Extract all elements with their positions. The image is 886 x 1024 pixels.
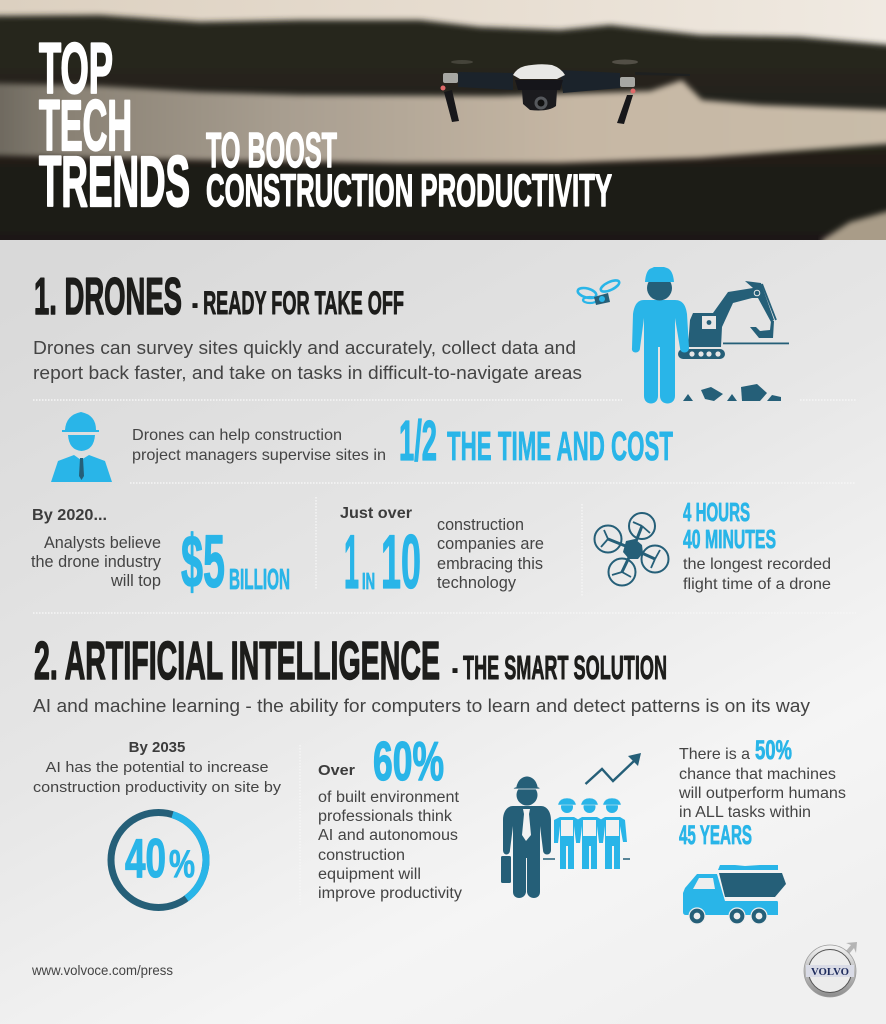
stat: five billion: BILLION: [229, 564, 290, 596]
text: by 2035: [33, 739, 282, 796]
stat: sixty percent: [318, 730, 462, 902]
drone photo: [440, 60, 690, 124]
heading: drones: - READY FOR TAKE OFF: [192, 285, 404, 321]
panel: artificial intelligence: [33, 631, 846, 924]
stat: five billion: [31, 507, 290, 603]
stat: one in ten: 1: [344, 520, 359, 605]
stat: fifty percent: in ALL tasks within: [679, 804, 811, 821]
stat: five billion: $5: [181, 520, 225, 603]
stat: fifty percent: chance that machines: [679, 766, 836, 783]
icon: construction worker: [632, 267, 689, 404]
icon: rocks: [683, 384, 781, 401]
footer url: www.volvoce.com/press: [31, 962, 173, 978]
hero title: TECH: [39, 87, 132, 166]
chart: forty percent ring: 40: [125, 827, 166, 889]
text: half the time: project managers supervise sites in: [132, 447, 386, 464]
stat: five billion: Analysts believe: [44, 534, 161, 552]
icon: small drone: [577, 278, 621, 305]
hero photo: blurred landscape: [0, 15, 886, 270]
icon: manager with workers: [501, 776, 630, 898]
stat: half the time and cost: 1/2: [399, 409, 437, 473]
hero title: TO BOOST: [206, 124, 337, 178]
divider lines: [33, 400, 856, 613]
text: by 2035: construction productivity on site by: [33, 779, 282, 796]
stat: one in ten: technology: [437, 574, 517, 592]
stat: one in ten: Just over: [340, 505, 412, 522]
stat: sixty percent: AI and autonomous: [318, 827, 458, 844]
icon: dump truck: [683, 865, 786, 924]
stat: sixty percent: equipment will: [318, 866, 421, 883]
chart: forty percent ring: %: [169, 843, 195, 886]
text: ai intro: AI and machine learning - the ability for computers to learn and detect patterns is on its way: [33, 696, 810, 716]
stat: five billion: the drone industry: [31, 553, 162, 571]
stat: sixty percent: construction: [318, 847, 405, 864]
stat: fifty percent: 45 YEARS: [679, 820, 752, 850]
hero title: TOP: [39, 30, 113, 109]
stat: fifty percent: There is a: [679, 746, 750, 763]
text: drones intro: [33, 337, 582, 383]
stat: sixty percent: Over: [318, 762, 355, 779]
logo: volvo: [804, 942, 857, 997]
stat: sixty percent: of built environment: [318, 789, 460, 806]
divider line: [299, 745, 301, 905]
hero banner: [0, 0, 886, 240]
stat: flight time: flight time of a drone: [683, 576, 831, 593]
stat: one in ten: IN: [362, 568, 375, 594]
stat: flight time: [683, 497, 831, 593]
stat: five billion: will top: [110, 572, 161, 590]
stat: sixty percent: improve productivity: [318, 885, 462, 902]
panel: drones: [31, 267, 856, 613]
logo: volvo: VOLVO: [811, 967, 849, 978]
stat: fifty percent: will outperform humans: [678, 785, 846, 802]
stat: sixty percent: 60%: [373, 730, 444, 792]
stat: sixty percent: professionals think: [318, 808, 452, 825]
stat: flight time: 4 HOURS: [683, 497, 750, 527]
text: half the time: Drones can help construction: [132, 427, 342, 444]
stat: one in ten: companies are: [437, 535, 544, 553]
stat: one in ten: [340, 505, 544, 605]
stat: flight time: the longest recorded: [683, 556, 831, 573]
hero title: TRENDS: [39, 143, 190, 222]
text: drones intro: report back faster, and take on tasks in difficult-to-navigate areas: [33, 362, 582, 383]
stat: one in ten: 10: [381, 520, 421, 605]
icon: site manager: [51, 412, 112, 482]
text: by 2035: By 2035: [129, 739, 185, 756]
text: half the time: [132, 427, 386, 464]
page background: [0, 240, 886, 1024]
heading: artificial intelligence: - THE SMART SOLUTION: [452, 649, 667, 686]
stat: fifty percent: [678, 735, 846, 850]
stat: five billion: By 2020...: [32, 507, 107, 524]
chart: forty percent ring: [111, 812, 206, 908]
hero title: [38, 42, 612, 208]
heading: drones: 1. DRONES: [34, 268, 182, 326]
text: drones intro: Drones can survey sites quickly and accurately, collect data and: [33, 337, 576, 358]
stat: one in ten: construction: [437, 516, 524, 534]
icon: excavator: [678, 281, 789, 359]
icon: rising arrow: [586, 753, 641, 784]
heading: artificial intelligence: 2. ARTIFICIAL INTELLIGENCE: [34, 631, 440, 691]
stat: flight time: 40 MINUTES: [683, 524, 776, 554]
text: by 2035: AI has the potential to increase: [46, 759, 268, 776]
stat: half the time and cost: THE TIME AND COST: [447, 423, 673, 469]
stat: fifty percent: 50%: [755, 735, 792, 765]
icon: quadcopter: [594, 513, 668, 586]
stat: half the time and cost: [399, 409, 673, 473]
stat: one in ten: embracing this: [437, 555, 543, 573]
